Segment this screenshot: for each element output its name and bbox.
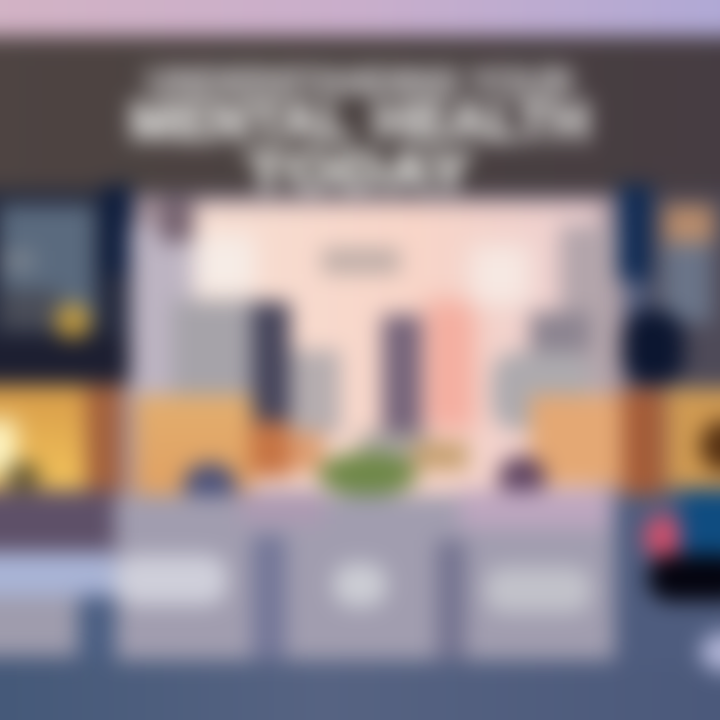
panel: lower-left blue strip (0, 552, 115, 596)
panel: column 2 upper (130, 225, 195, 395)
panel: left column (0, 190, 130, 385)
title line 2: MENTAL HEALTH (130, 92, 590, 151)
left screen (0, 205, 95, 325)
lower card 3 text (485, 567, 591, 613)
panel: centre background (190, 205, 600, 495)
footer band (0, 660, 720, 720)
divider pillar 1 (252, 535, 286, 660)
left dark base (0, 338, 130, 378)
centre tower (382, 315, 422, 433)
lower-left pillar (78, 600, 116, 665)
orange tower base (250, 422, 290, 477)
right grey stack (492, 352, 590, 430)
car: blue body (680, 490, 720, 560)
column 2 top accent (160, 198, 194, 242)
left yellow head (5, 462, 41, 492)
lower-right light (700, 632, 720, 672)
grey slope (290, 350, 340, 435)
top gradient strip (0, 0, 720, 36)
orange side (290, 432, 324, 472)
title line 1: UNDERSTANDING YOUR (147, 61, 573, 102)
navy dome (183, 463, 237, 507)
green plant (318, 452, 418, 496)
car: black lower (648, 555, 720, 601)
left brown strip (86, 385, 122, 500)
divider pillar 2 (436, 540, 466, 660)
panel: orange column 2 (135, 395, 253, 500)
panel: orange right (530, 395, 625, 485)
left badge (55, 303, 91, 339)
centre glow (425, 300, 475, 430)
left screen highlight (0, 250, 35, 272)
dark tower (252, 302, 290, 427)
lower card 1 text (115, 555, 227, 605)
panel: right orange (666, 388, 720, 488)
car: red tail (644, 515, 684, 559)
lower card 3 pink top (460, 490, 610, 528)
lower-right background (615, 495, 720, 665)
right screen (662, 243, 712, 323)
orange right strip (622, 388, 664, 503)
middle backing (115, 196, 625, 506)
lower card 1 pink top (240, 490, 325, 524)
right dark circle (622, 310, 684, 385)
right badge (664, 205, 714, 243)
right dark blob (530, 312, 590, 352)
panel: right column (650, 195, 720, 385)
panel: left orange (0, 385, 88, 495)
left glow (0, 420, 16, 475)
title line 3: TODAY (248, 143, 472, 199)
yellow ground (412, 442, 468, 470)
column 2 light spot (195, 235, 255, 295)
purple dome (498, 456, 546, 500)
navy right pillar (618, 185, 654, 280)
left navy pillar (103, 185, 133, 275)
centre heading (322, 248, 400, 274)
lower-left grey block (0, 596, 80, 656)
panel: lower cards row (115, 495, 617, 660)
left screen dark band (0, 290, 60, 330)
centre light spot (470, 245, 530, 305)
header band (0, 36, 720, 194)
lower card 2 icon (333, 563, 387, 607)
left figures (0, 490, 115, 552)
grey ground (360, 432, 430, 460)
grey block (172, 300, 262, 415)
right panel grey (560, 225, 616, 390)
right figure head (700, 420, 720, 472)
